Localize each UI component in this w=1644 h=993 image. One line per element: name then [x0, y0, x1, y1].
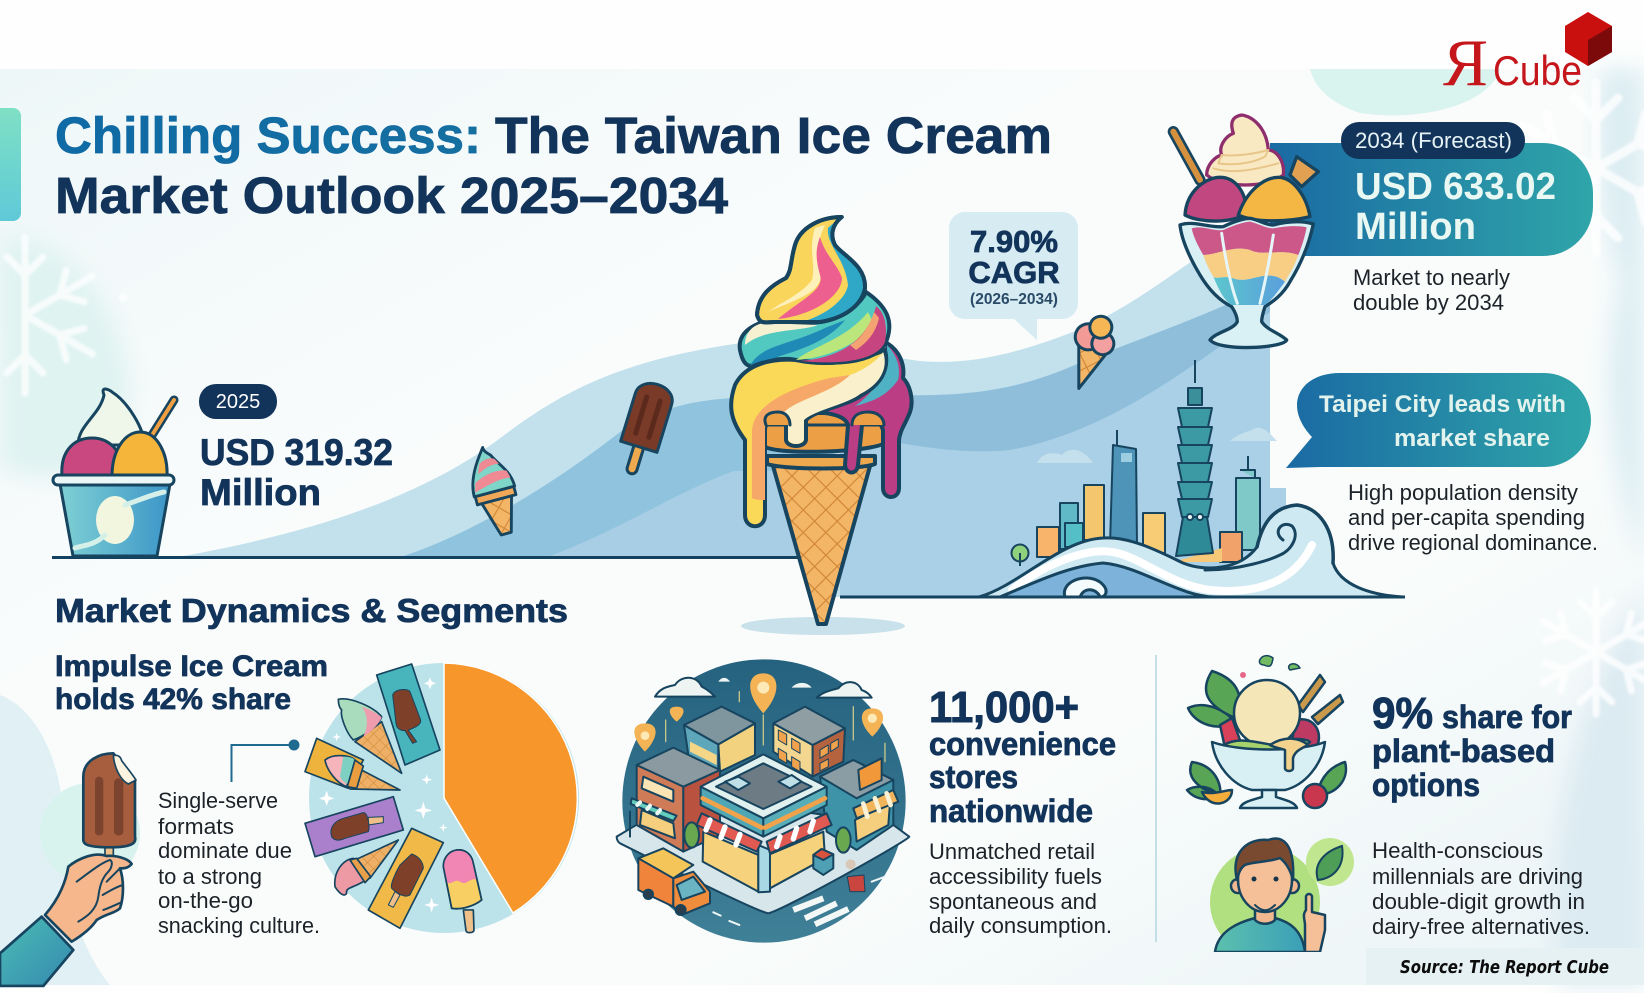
text: single serve: [158, 788, 320, 938]
icon: plant-based sundae: [1187, 656, 1346, 808]
text: single serve: on-the-go: [158, 888, 253, 913]
text: millennials: Health-conscious: [1372, 838, 1543, 863]
callout: CAGR: [949, 212, 1078, 340]
logo: RCube: Я: [1443, 26, 1488, 100]
title: Market Outlook 2025–2034: [55, 167, 729, 224]
value 2025: USD 319.32: [200, 432, 393, 473]
icon: sundae: [1173, 115, 1318, 348]
icon: snowflake top right: [1511, 83, 1644, 253]
text: Taipei details: drive regional dominance.: [1348, 530, 1598, 555]
icon: millennial with leaf: [1210, 838, 1354, 957]
text: retail accessibility: daily consumption.: [929, 913, 1112, 938]
value 2025: [200, 432, 393, 513]
icon: convenience store scene: [617, 659, 909, 943]
text: market to double: Market to nearly: [1353, 265, 1510, 290]
stat: 11,000+ stores: 11,000+: [929, 683, 1079, 732]
text: Taipei details: and per-capita spending: [1348, 505, 1585, 530]
stat: 9 percent plant-based: options: [1372, 767, 1480, 803]
text: market to double: double by 2034: [1353, 290, 1504, 315]
icon: tree: [1012, 544, 1028, 566]
stat: 11,000+ stores: nationwide: [929, 793, 1093, 829]
callout: Taipei City: Taipei City leads with: [1319, 391, 1566, 418]
divider: [1155, 655, 1157, 942]
icon: snowflake bottom right: [1534, 590, 1644, 714]
title: The Taiwan Ice Cream: [495, 107, 1052, 164]
year badge 2034 forecast: [1341, 122, 1525, 159]
value 2034: [1355, 166, 1556, 248]
chart axis right: [840, 596, 1405, 598]
shadow under big cone: [741, 617, 905, 635]
text: Taipei details: High population density: [1348, 480, 1578, 505]
icon: wave: [979, 505, 1403, 597]
callout: CAGR: (2026–2034): [970, 291, 1058, 308]
text: millennials: double-digit growth in: [1372, 889, 1585, 914]
logo: RCube: Cube: [1493, 47, 1582, 94]
text: single serve: Single-serve: [158, 788, 278, 813]
text: retail accessibility: [929, 839, 1112, 938]
title: Chilling Success:: [55, 107, 481, 164]
heading: market dynamics: Market Dynamics & Segments: [55, 592, 568, 629]
chart: growth area: [183, 239, 1286, 597]
year badge 2025: [199, 384, 277, 419]
heading: impulse ice cream: holds 42% share: [55, 683, 291, 716]
text: single serve: dominate due: [158, 838, 292, 863]
text: market to double: [1353, 265, 1510, 315]
stat: 11,000+ stores: convenience: [929, 726, 1116, 762]
text: millennials: millennials are driving: [1372, 864, 1583, 889]
text: Taipei details: [1348, 480, 1598, 555]
text: millennials: dairy-free alternatives.: [1372, 914, 1590, 939]
icon: small cone: [1060, 310, 1121, 395]
icon: snowflake left: [7, 237, 127, 393]
icons: impulse products: [305, 664, 482, 933]
text: retail accessibility: accessibility fuels: [929, 864, 1102, 889]
icon: hand with popsicle: [0, 753, 136, 986]
text: retail accessibility: Unmatched retail: [929, 839, 1095, 864]
stat: 9 percent plant-based: share for: [1442, 699, 1572, 735]
source note: [1366, 948, 1644, 985]
forecast value pill: [1270, 143, 1593, 256]
icon: small soft serve: [462, 442, 526, 539]
text: single serve: to a strong: [158, 864, 262, 889]
text: retail accessibility: spontaneous and: [929, 889, 1097, 914]
icon: ice cream cup 2025: [53, 389, 174, 556]
icon: big ice cream cone: [731, 217, 912, 624]
heading: impulse ice cream: Impulse Ice Cream: [55, 650, 328, 683]
callout: Taipei City: market share: [1394, 425, 1550, 452]
year badge 2025: 2025: [216, 391, 260, 413]
year badge 2034 forecast: 2034 (Forecast): [1355, 128, 1512, 153]
callout: Taipei City: [1286, 373, 1591, 468]
decorative tab: [0, 108, 21, 221]
callout: CAGR: CAGR: [968, 255, 1060, 290]
stat: 9 percent plant-based: plant-based: [1372, 733, 1555, 769]
chart axis left: [52, 556, 802, 559]
text: single serve: formats: [158, 814, 234, 839]
icon: Taipei skyline: [1037, 360, 1260, 562]
chart: pie 42 percent: [309, 663, 579, 933]
heading: impulse ice cream: [55, 650, 328, 716]
connector to pie: [232, 740, 298, 782]
value 2034: USD 633.02: [1355, 166, 1556, 208]
value 2025: Million: [200, 472, 321, 513]
stat: 11,000+ stores: [929, 683, 1116, 829]
logo: RCube: [1443, 12, 1612, 100]
stat: 9 percent plant-based: 9%: [1372, 689, 1433, 738]
title: [55, 107, 1052, 224]
stat: 9 percent plant-based: [1372, 689, 1572, 803]
callout: CAGR: 7.90%: [970, 224, 1058, 259]
text: millennials: [1372, 838, 1590, 939]
value 2034: Million: [1355, 206, 1476, 248]
stat: 11,000+ stores: stores: [929, 759, 1018, 795]
icon: chocolate popsicle: [612, 379, 676, 479]
text: single serve: snacking culture.: [158, 913, 320, 938]
